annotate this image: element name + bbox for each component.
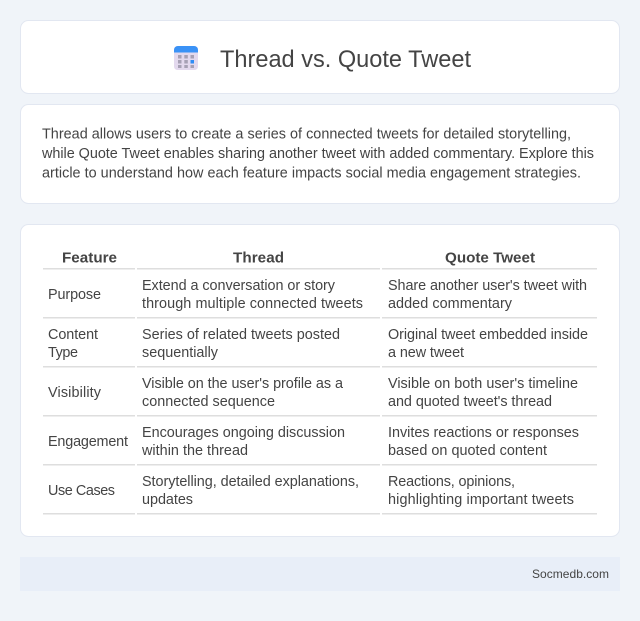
row: Purpose: Share another user's tweet with: [388, 278, 587, 294]
row: Content Type: a new tweet: [388, 345, 464, 361]
row: Content Type: sequentially: [142, 345, 219, 361]
row: Content Type: Series of related tweets posted: [142, 327, 340, 343]
row: Content Type: [48, 327, 588, 361]
row: Content Type: Original tweet embedded inside: [388, 327, 588, 343]
row: Use Cases: Storytelling, detailed explanations,: [142, 474, 359, 490]
title: Thread vs. Quote Tweet: [220, 46, 471, 73]
row: Visibility: Visibility: [48, 385, 102, 401]
row: Visibility: connected sequence: [142, 394, 275, 410]
row: Purpose: through multiple connected tweets: [142, 296, 363, 312]
intro text: [41, 126, 594, 182]
row: Visibility: [48, 376, 578, 410]
row: Visibility: Visible on both user's timeline: [388, 376, 578, 392]
row: Use Cases: Reactions, opinions,: [388, 474, 515, 490]
row: Engagement: Encourages ongoing discussion: [142, 425, 345, 441]
panel: title card: [20, 20, 620, 94]
row: Engagement: within the thread: [141, 443, 248, 459]
intro text: article to understand how each feature impacts social media engagement strategies.: [42, 166, 581, 182]
row: Content Type: Content: [48, 327, 98, 343]
table header: [62, 250, 535, 266]
table header: Thread: [233, 250, 284, 266]
intro text: while Quote Tweet enables sharing another tweet with added commentary. Explore this: [41, 146, 594, 162]
row: Purpose: [48, 278, 587, 312]
footer credit: Socmedb.com: [532, 567, 609, 581]
table rules: [43, 268, 597, 514]
intro text: Thread allows users to create a series of connected tweets for detailed storytelling,: [42, 126, 571, 142]
row: Use Cases: Use Cases: [48, 483, 115, 499]
row: Use Cases: updates: [142, 492, 193, 508]
panel: comparison table: [20, 224, 620, 536]
row: Use Cases: highlighting important tweets: [388, 492, 574, 508]
footer: [20, 557, 620, 591]
row: Use Cases: [48, 474, 574, 508]
row: Engagement: based on quoted content: [388, 443, 547, 459]
row: Content Type: Type: [48, 345, 78, 361]
row: Engagement: Invites reactions or responses: [388, 425, 579, 441]
table header: Feature: [62, 250, 117, 266]
row: Engagement: Engagement: [48, 434, 128, 450]
icon: calendar: [174, 46, 198, 70]
row: Visibility: Visible on the user's profile as a: [142, 376, 343, 392]
row: Purpose: Extend a conversation or story: [142, 278, 336, 294]
panel: intro card: [20, 104, 620, 204]
row: Purpose: added commentary: [388, 296, 513, 312]
row: Visibility: and quoted tweet's thread: [388, 394, 552, 410]
row: Purpose: Purpose: [48, 287, 101, 303]
row: Engagement: [48, 425, 579, 459]
table header: Quote Tweet: [445, 250, 535, 266]
